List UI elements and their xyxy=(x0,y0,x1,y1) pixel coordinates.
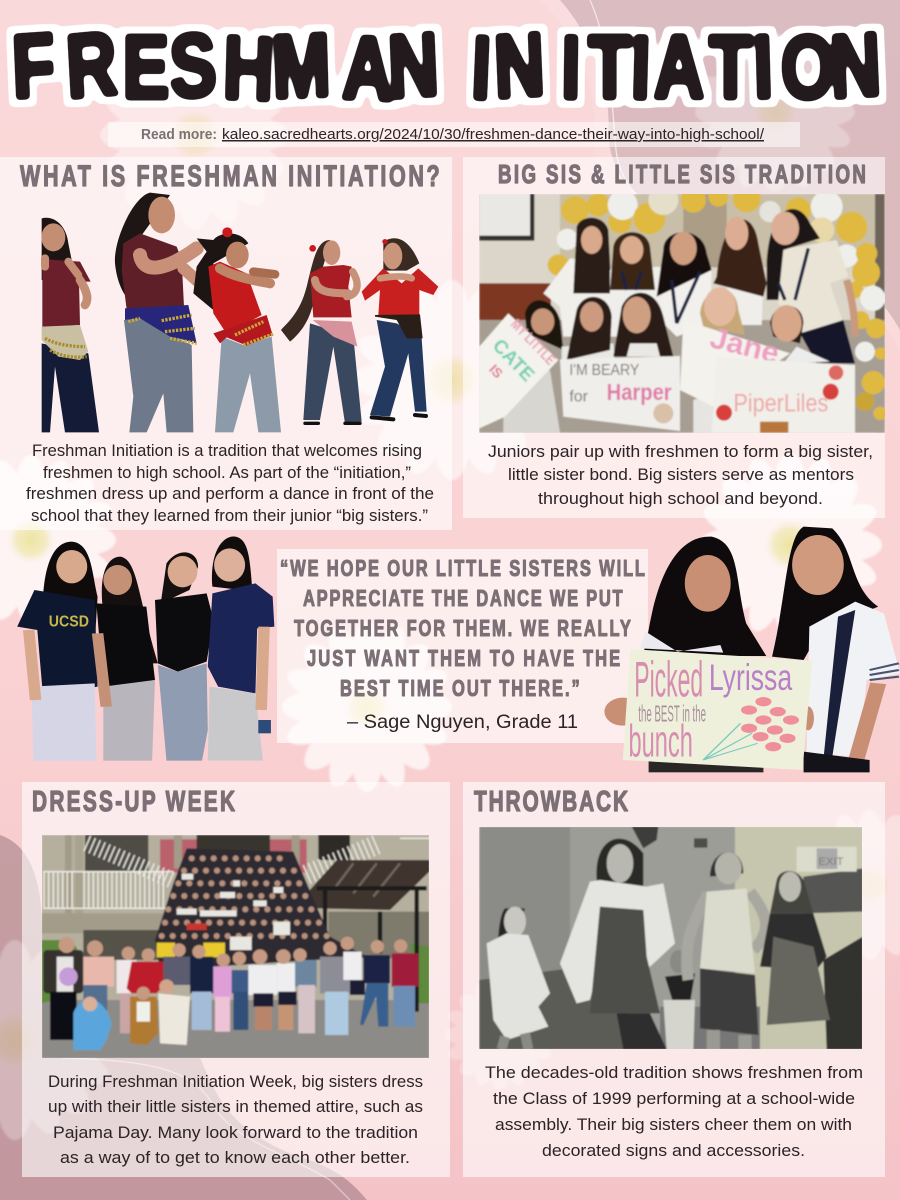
sign: piper liles xyxy=(712,357,855,433)
quote text: JUST WANT THEM TO HAVE THE xyxy=(307,646,620,672)
girl 1: UCSD xyxy=(49,612,89,630)
quote text: “WE HOPE OUR LITTLE SISTERS WILL xyxy=(280,556,645,582)
panel: throwback xyxy=(463,782,885,1177)
quote text xyxy=(280,556,645,702)
sign: my little cate: IS xyxy=(486,362,506,381)
sign: beary excited for harper: Harper xyxy=(607,379,672,405)
girl in white dress xyxy=(487,907,550,1049)
sign: my little cate: CATE xyxy=(488,336,538,386)
dancer 1 xyxy=(41,218,99,432)
back person xyxy=(663,950,695,1049)
panel: big sis and little sis xyxy=(463,157,887,518)
heading: DRESS-UP WEEK xyxy=(32,786,235,818)
sign: picked lyrissa: Picked xyxy=(634,651,703,707)
panel: what is freshman initiation xyxy=(0,157,452,530)
pergola xyxy=(308,860,429,1012)
girl 4 xyxy=(208,537,274,761)
description text: freshmen to high school. As part of the “initiation,” xyxy=(43,463,411,482)
top right blob xyxy=(540,0,900,350)
left girl xyxy=(640,537,766,772)
photo: black and white performance: EXIT xyxy=(818,856,844,868)
balloons xyxy=(548,184,887,420)
crowd xyxy=(155,848,367,970)
girl 2 xyxy=(96,557,158,761)
sign: my little cate xyxy=(479,313,558,428)
heading: BIG SIS & LITTLE SIS TRADITION xyxy=(498,159,866,189)
description text: school that they learned from their junior “big sisters.” xyxy=(31,506,428,525)
right girl xyxy=(772,527,900,772)
sign: beary excited for harper: for xyxy=(569,389,589,406)
description text xyxy=(488,442,873,508)
photo: two girls with sign xyxy=(604,527,900,772)
bottom left blob xyxy=(0,835,367,1200)
description text: During Freshman Initiation Week, big sisters dress xyxy=(48,1072,423,1091)
description text: The decades-old tradition shows freshmen from xyxy=(485,1063,863,1082)
sign: jane xyxy=(680,320,790,407)
description text xyxy=(26,441,434,525)
description text: Juniors pair up with freshmen to form a big sister, xyxy=(488,442,873,461)
quote text: BEST TIME OUT THERE.” xyxy=(340,676,580,702)
photo: group on stairs xyxy=(42,835,429,1058)
girl in white jacket xyxy=(560,839,675,1049)
dancer 4 xyxy=(281,240,362,423)
sign: picked lyrissa xyxy=(604,649,814,770)
girl in tank top xyxy=(687,852,766,1049)
attribution: – Sage Nguyen, Grade 11 xyxy=(347,712,578,733)
back row girls xyxy=(543,209,855,363)
front row girls xyxy=(503,287,830,433)
sign: jane: Jane xyxy=(707,321,783,370)
description text: up with their little sisters in themed attire, such as xyxy=(48,1097,423,1116)
photo: five dancers xyxy=(41,193,438,432)
quote text: TOGETHER FOR THEM. WE REALLY xyxy=(294,616,631,642)
dancer 3 xyxy=(193,227,281,432)
sign: piper liles: PiperLiles xyxy=(733,390,828,418)
girl in dark jacket xyxy=(760,871,830,1025)
stair railings xyxy=(43,838,429,908)
read more link: kaleo.sacredhearts.org/2024/10/30/freshmen-dance-their-way-into-high-school/ xyxy=(222,126,765,143)
photo: four girls cutout xyxy=(17,537,274,761)
heading: WHAT IS FRESHMAN INITIATION? xyxy=(20,158,440,193)
description text: decorated signs and accessories. xyxy=(542,1141,805,1160)
description text: freshmen dress up and perform a dance in front of the xyxy=(26,484,434,503)
photo: group with signs xyxy=(479,184,887,433)
dancer 5 xyxy=(362,238,438,419)
sign: my little cate: MY LITTLE xyxy=(507,317,558,369)
sign: beary excited for harper: I'M BEARY xyxy=(569,362,640,379)
description text: throughout high school and beyond. xyxy=(538,489,823,508)
girl 1 xyxy=(17,542,98,761)
panel: quote xyxy=(277,549,648,743)
description text: Freshman Initiation is a tradition that welcomes rising xyxy=(32,441,422,460)
description text: little sister bond. Big sisters serve as mentors xyxy=(508,465,854,484)
description text: assembly. Their big sisters cheer them on with xyxy=(495,1115,852,1134)
girl 3 xyxy=(155,552,214,761)
description text xyxy=(48,1072,423,1167)
description text: the Class of 1999 performing at a school-wide xyxy=(493,1089,855,1108)
description text xyxy=(485,1063,863,1160)
sign: beary excited for harper xyxy=(560,356,680,431)
sign: picked lyrissa: bunch xyxy=(629,717,693,767)
quote text: APPRECIATE THE DANCE WE PUT xyxy=(303,586,623,612)
heading: THROWBACK xyxy=(474,786,628,818)
front row xyxy=(43,937,418,1050)
photo: black and white performance xyxy=(479,827,863,1049)
read more link xyxy=(108,122,800,147)
panel: dress-up week xyxy=(22,782,450,1177)
dancer 2 xyxy=(115,193,200,432)
read more link: Read more: xyxy=(141,126,217,143)
description text: as a way of to get to know each other better. xyxy=(60,1148,410,1167)
title: FRESHMAN INITIATION xyxy=(10,13,883,120)
description text: Pajama Day. Many look forward to the tradition xyxy=(53,1123,418,1142)
